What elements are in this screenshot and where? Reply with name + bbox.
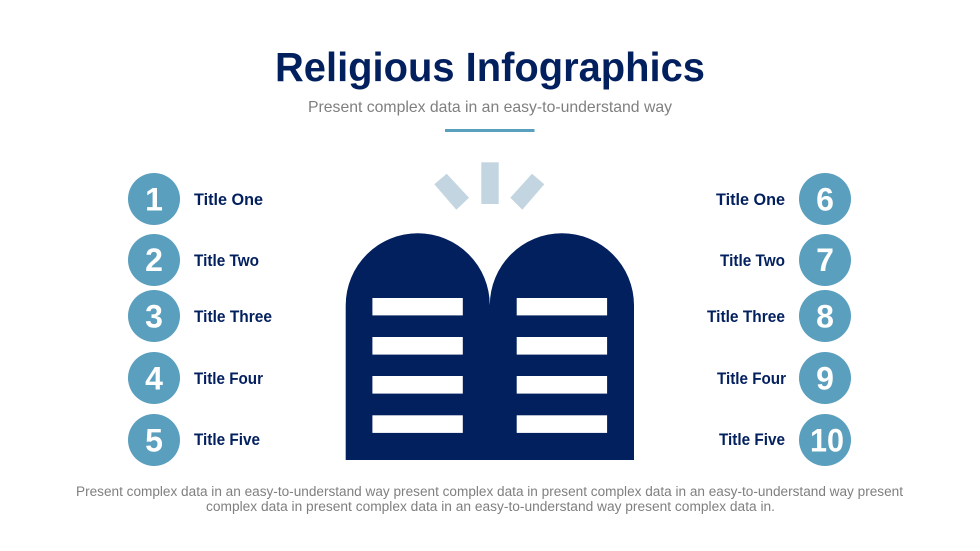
item 9: Title Four: [717, 369, 786, 388]
item 5: Title Five: [194, 430, 260, 449]
item 2: 2: [145, 242, 163, 278]
item 8: 8: [816, 298, 834, 334]
item 8: Title Three: [707, 307, 785, 326]
item 4: 4: [145, 360, 163, 396]
item 2: [128, 234, 259, 286]
accent underline: [445, 129, 534, 132]
icon: light rays: [434, 162, 544, 210]
subtitle: Present complex data in an easy-to-understand way: [308, 99, 672, 116]
item 1: [128, 173, 263, 225]
title: Religious Infographics: [275, 44, 705, 90]
item 1: 1: [145, 182, 163, 218]
item 1: Title One: [194, 190, 263, 209]
item 4: [128, 352, 263, 404]
item 6: 6: [816, 182, 834, 218]
item 3: [128, 290, 272, 342]
item 7: 7: [816, 242, 834, 278]
item 3: Title Three: [194, 307, 272, 326]
item 8: [707, 290, 851, 342]
item 3: 3: [145, 298, 163, 334]
item 5: [128, 414, 260, 466]
item 7: [720, 234, 851, 286]
item 2: Title Two: [194, 251, 259, 270]
item 10: [719, 414, 851, 466]
item 7: Title Two: [720, 251, 785, 270]
item 9: [717, 352, 851, 404]
item 5: 5: [145, 422, 163, 458]
footer text: Present complex data in an easy-to-understand way present complex data in present complex data in an easy-to-understand way present: [76, 484, 903, 499]
item 9: 9: [816, 360, 834, 396]
icon: stone tablets: [346, 233, 634, 460]
item 4: Title Four: [194, 369, 263, 388]
item 6: Title One: [716, 190, 785, 209]
item 10: 10: [810, 422, 844, 458]
footer text: [76, 484, 903, 514]
item 6: [716, 173, 851, 225]
item 10: Title Five: [719, 430, 785, 449]
footer text: complex data in present complex data in an easy-to-understand way present complex data in.: [206, 499, 775, 514]
